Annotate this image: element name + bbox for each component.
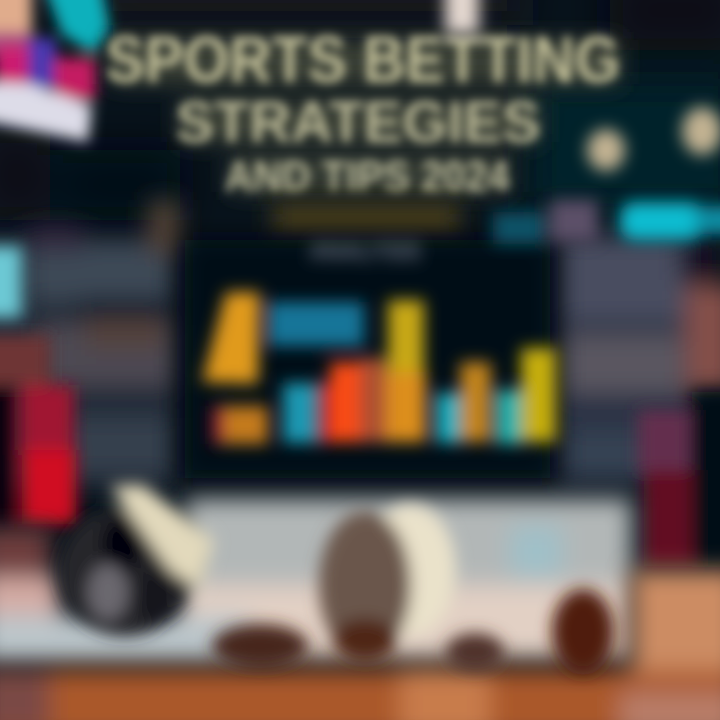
background wall [0,0,720,220]
icon: slanted number [202,292,260,384]
icon: colourful top-left mosaic [0,0,110,142]
panel: left shelves [0,200,180,490]
cyan accents [493,200,720,244]
panel: chart screen [185,240,550,478]
icon: small brown objects [212,624,504,671]
left red cabinet [0,335,76,530]
title text: STRATEGIES [176,90,540,155]
icon: top centre figure [445,0,479,34]
table surface [0,498,632,662]
icon: cyan edge block [0,246,22,318]
panel: right shelves [558,235,720,485]
subtitle: grey: ANALYSIS [309,235,421,266]
title text: SPORTS BETTING [106,22,620,96]
bars [212,300,556,444]
bar chart [202,292,556,444]
icon: black and white helmet [59,484,214,636]
right dark red cabinet [638,392,720,567]
icon: brown ball [552,589,614,675]
subtitle: gold [272,204,460,232]
wooden desk [0,570,720,720]
icon: cream lights [587,107,720,171]
title [106,22,620,201]
title text: AND TIPS 2024 [224,152,510,201]
chart label [268,302,364,346]
title backing glow [110,40,620,192]
icon: egg-shaped ball [319,504,456,662]
title text [106,22,620,201]
